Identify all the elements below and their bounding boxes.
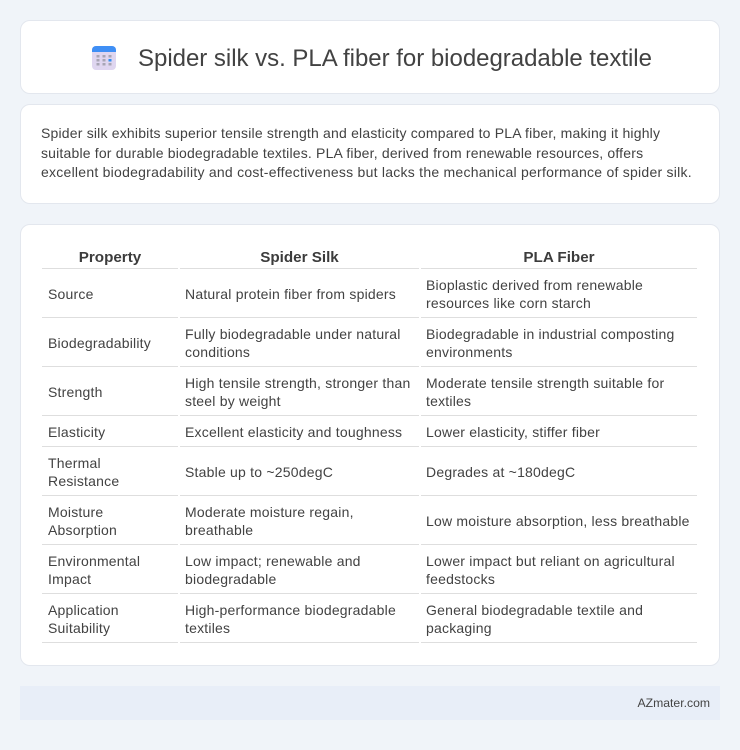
header: PLA Fiber: PLA Fiber — [523, 249, 595, 266]
row: Biodegradability — [48, 326, 674, 360]
row: Source: Source — [48, 286, 94, 302]
row: Moisture Absorption: Moderate moisture regain, — [185, 504, 354, 520]
row: Application Suitability: textiles — [185, 620, 230, 636]
row: Thermal Resistance: Stable up to ~250degC — [185, 464, 333, 480]
row: Thermal Resistance: Resistance — [48, 472, 119, 488]
icon: calendar — [92, 46, 116, 70]
row: Thermal Resistance: Degrades at ~180degC — [426, 464, 575, 480]
row: Environmental Impact: Environmental — [48, 552, 140, 568]
row: Biodegradability: Fully biodegradable under natural — [185, 326, 401, 342]
intro text: excellent biodegradability and cost-effectiveness but lacks the mechanical performance of spider silk. — [41, 164, 692, 180]
row: Application Suitability: Suitability — [48, 620, 110, 636]
row: Environmental Impact: Low impact; renewable and — [185, 552, 361, 568]
row: Application Suitability: Application — [48, 602, 119, 618]
row: Source: Bioplastic derived from renewable — [426, 276, 643, 292]
row: Thermal Resistance — [48, 454, 575, 488]
title panel — [20, 20, 720, 94]
row: Thermal Resistance: Thermal — [48, 454, 101, 470]
intro text: suitable for durable biodegradable textiles. PLA fiber, derived from renewable resources, offers — [41, 145, 643, 161]
row: Environmental Impact: feedstocks — [426, 570, 495, 586]
header: Property: Property — [79, 249, 141, 266]
row: Source — [48, 276, 643, 310]
row: Biodegradability: conditions — [185, 344, 250, 360]
row: Strength: textiles — [426, 392, 471, 408]
row: Application Suitability: High-performance biodegradable — [185, 602, 396, 618]
row: Source: Natural protein fiber from spiders — [185, 286, 396, 302]
intro text — [41, 125, 692, 180]
intro text: Spider silk exhibits superior tensile strength and elasticity compared to PLA fiber, making it highly — [41, 125, 660, 141]
row: Application Suitability: General biodegradable textile and — [426, 602, 643, 618]
row: Moisture Absorption — [48, 504, 690, 538]
row: Biodegradability: environments — [426, 344, 513, 360]
footer bar — [20, 686, 720, 720]
comparison table panel — [20, 224, 720, 666]
row: Environmental Impact: Lower impact but reliant on agricultural — [426, 552, 675, 568]
row: Biodegradability: Biodegradability — [48, 334, 151, 350]
row: Moisture Absorption: Moisture — [48, 504, 103, 520]
row: Strength: Moderate tensile strength suitable for — [426, 374, 664, 390]
row: Source: resources like corn starch — [426, 294, 591, 310]
row: Strength: Strength — [48, 384, 103, 400]
row: Environmental Impact — [48, 552, 675, 587]
header: Spider Silk: Spider Silk — [260, 249, 339, 266]
footer source credit: AZmater.com — [638, 696, 710, 710]
row: Elasticity: Elasticity — [48, 424, 105, 440]
row: Strength — [48, 374, 664, 409]
row: Moisture Absorption: Low moisture absorption, less breathable — [426, 512, 690, 528]
row: Moisture Absorption: Absorption — [48, 522, 117, 538]
row: Elasticity — [48, 424, 600, 440]
row: Strength: steel by weight — [185, 392, 281, 408]
row: Application Suitability — [48, 602, 643, 636]
title: Spider silk vs. PLA fiber for biodegradable textile — [138, 45, 652, 72]
row: Strength: High tensile strength, stronger than — [185, 374, 410, 390]
intro text panel — [20, 104, 720, 204]
row: Environmental Impact: biodegradable — [185, 570, 276, 586]
row: Elasticity: Lower elasticity, stiffer fiber — [426, 424, 600, 440]
row: Environmental Impact: Impact — [48, 570, 91, 586]
row: Elasticity: Excellent elasticity and toughness — [185, 424, 402, 440]
row: Moisture Absorption: breathable — [185, 522, 253, 538]
row: Biodegradability: Biodegradable in industrial composting — [426, 326, 674, 342]
row: Application Suitability: packaging — [426, 620, 492, 636]
